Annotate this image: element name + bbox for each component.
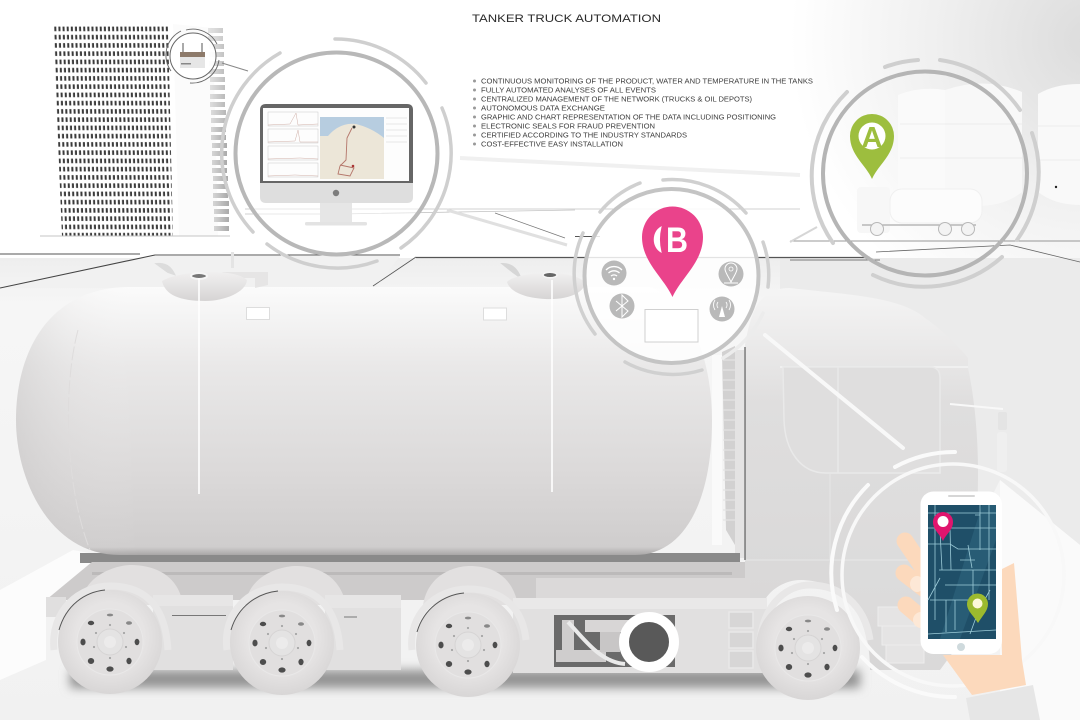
feature list bbox=[473, 76, 813, 148]
gateway badge B bbox=[574, 180, 769, 374]
wheel 4 bbox=[756, 596, 860, 700]
tank label 1 bbox=[246, 308, 270, 320]
phone pin green bbox=[967, 594, 988, 623]
exposed equipment bay bbox=[554, 615, 675, 667]
cab steps bbox=[878, 607, 924, 663]
feature list: CONTINUOUS MONITORING OF THE PRODUCT, WATER AND TEMPERATURE IN THE TANKS bbox=[481, 76, 813, 86]
building side windows bbox=[208, 28, 229, 231]
dashboard map bbox=[320, 117, 384, 179]
pin A: A bbox=[862, 122, 883, 154]
building windows bbox=[53, 25, 173, 236]
router badge bbox=[166, 29, 219, 83]
tank sensor line 1 bbox=[198, 278, 200, 494]
small tanker truck at depot bbox=[857, 187, 982, 236]
phone ring bbox=[842, 464, 1064, 686]
monitor outer arcs bbox=[222, 39, 451, 268]
hand and sleeve bbox=[904, 541, 1040, 720]
bullet markers bbox=[473, 80, 476, 146]
monitor device bbox=[260, 104, 413, 226]
rear wheel fenders bbox=[54, 585, 870, 650]
connector router to monitor bbox=[222, 63, 248, 71]
phone outer arcs bbox=[831, 452, 955, 697]
depot storage tanks bbox=[898, 83, 1080, 206]
pin A bbox=[850, 114, 894, 179]
connector line to phone bbox=[765, 335, 903, 448]
router device bbox=[180, 43, 205, 68]
phone map bbox=[928, 505, 996, 639]
tank body bbox=[16, 287, 712, 555]
cab mirror bbox=[950, 404, 1007, 472]
cab bbox=[712, 288, 978, 670]
mudguard domes bbox=[80, 565, 518, 605]
wheel 2 bbox=[230, 591, 334, 695]
icon: bluetooth bbox=[610, 294, 634, 318]
sensor highlight ring bbox=[624, 617, 674, 667]
wheel arch shadow lines bbox=[59, 590, 464, 632]
phone badge bbox=[831, 452, 1064, 720]
feature list: GRAPHIC AND CHART REPRESENTATION OF THE DATA INCLUDING POSITIONING bbox=[481, 112, 776, 122]
dashboard side table bbox=[386, 118, 407, 142]
wheel 3 bbox=[416, 593, 520, 697]
connector depot to truck bbox=[790, 227, 817, 242]
ground shadow under truck bbox=[70, 670, 860, 688]
chassis frame bbox=[46, 553, 750, 617]
tank label 2 bbox=[484, 308, 506, 320]
phone pin pink bbox=[933, 512, 953, 541]
feature list: CERTIFIED ACCORDING TO THE INDUSTRY STANDARDS bbox=[481, 130, 687, 140]
depot ring bbox=[823, 72, 1027, 276]
icon: location bbox=[718, 262, 744, 286]
tank hatch 1 bbox=[157, 252, 268, 301]
pin B: B bbox=[666, 221, 688, 260]
feature list: FULLY AUTOMATED ANALYSES OF ALL EVENTS bbox=[481, 86, 656, 94]
tank sensor line 2 bbox=[551, 280, 553, 492]
feature list: AUTONOMOUS DATA EXCHANGE bbox=[481, 104, 605, 112]
gateway display box bbox=[645, 310, 698, 342]
tank hatch 2 bbox=[503, 264, 585, 299]
office building bbox=[40, 24, 230, 236]
monitor badge bbox=[222, 39, 451, 268]
monitor ring bbox=[236, 52, 438, 254]
depot badge A bbox=[812, 60, 1039, 287]
title: TANKER TRUCK AUTOMATION bbox=[472, 13, 661, 25]
smartphone bbox=[920, 492, 1002, 654]
gateway outer arcs bbox=[574, 180, 769, 374]
feature list: ELECTRONIC SEALS FOR FRAUD PREVENTION bbox=[481, 122, 655, 130]
gateway ring bbox=[584, 189, 758, 363]
depot outer arcs bbox=[812, 60, 1039, 287]
pin B bbox=[642, 206, 703, 297]
tanker truck bbox=[16, 252, 1007, 700]
icon: wifi bbox=[602, 260, 626, 286]
chassis side boxes bbox=[153, 595, 767, 673]
chassis steps bbox=[729, 612, 753, 668]
feature list: CENTRALIZED MANAGEMENT OF THE NETWORK (TRUCKS & OIL DEPOTS) bbox=[481, 94, 752, 104]
dashboard charts bbox=[268, 112, 318, 177]
feature list: COST-EFFECTIVE EASY INSTALLATION bbox=[481, 140, 623, 148]
road lines bbox=[0, 158, 1080, 288]
icon: antenna bbox=[710, 296, 734, 322]
wheel 1 bbox=[58, 590, 162, 694]
